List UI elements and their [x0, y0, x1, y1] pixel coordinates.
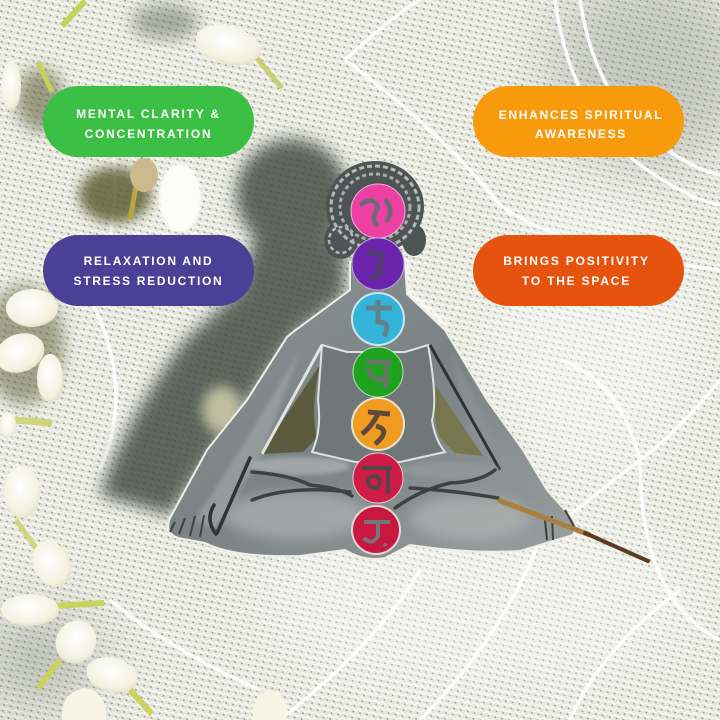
pill: mental clarity: MENTAL CLARITY & [76, 106, 221, 120]
pill: mental clarity [43, 86, 254, 157]
flower: left stack [0, 285, 64, 438]
incense stick [498, 500, 648, 561]
left arm highlight [195, 350, 300, 530]
chakra: throat cyan [352, 293, 404, 345]
arm gaps [260, 365, 320, 454]
pill: mental clarity: CONCENTRATION [85, 126, 212, 140]
pill: spiritual awareness: ENHANCES SPIRITUAL [499, 108, 663, 122]
shadow tint patch behind arm [202, 386, 242, 434]
flower: lower left [1, 466, 287, 720]
right arm highlight [450, 350, 545, 510]
pill: relaxation [43, 235, 254, 306]
chakra: root red [352, 506, 400, 554]
chakra: heart green [353, 347, 403, 397]
leg grooves [210, 458, 498, 534]
chakra: solar plexus orange [352, 398, 404, 450]
flower: top [191, 18, 282, 88]
chakra: third eye purple [352, 238, 404, 290]
thighs highlight [223, 491, 367, 539]
flowers [0, 1, 287, 720]
pill: positivity: BRINGS POSITIVITY [503, 254, 650, 268]
hair [324, 161, 426, 259]
pill: spiritual awareness [473, 86, 684, 157]
chakra: sacral red [353, 453, 403, 503]
pill: spiritual awareness: AWARENESS [535, 126, 627, 140]
pill: positivity [473, 235, 684, 306]
chakra: crown pink [351, 184, 405, 238]
cast shadow of figure [100, 139, 348, 515]
flower: top left bud [1, 1, 85, 111]
flower: mid left [79, 158, 201, 232]
incense holder figure [168, 161, 648, 561]
pill: relaxation: RELAXATION AND [84, 254, 213, 268]
torso panel [312, 345, 445, 462]
white halo at neck [405, 262, 447, 326]
pill: relaxation: STRESS REDUCTION [74, 274, 223, 288]
toes [170, 510, 575, 540]
body silhouette [168, 262, 575, 559]
pill: positivity: TO THE SPACE [522, 274, 631, 288]
